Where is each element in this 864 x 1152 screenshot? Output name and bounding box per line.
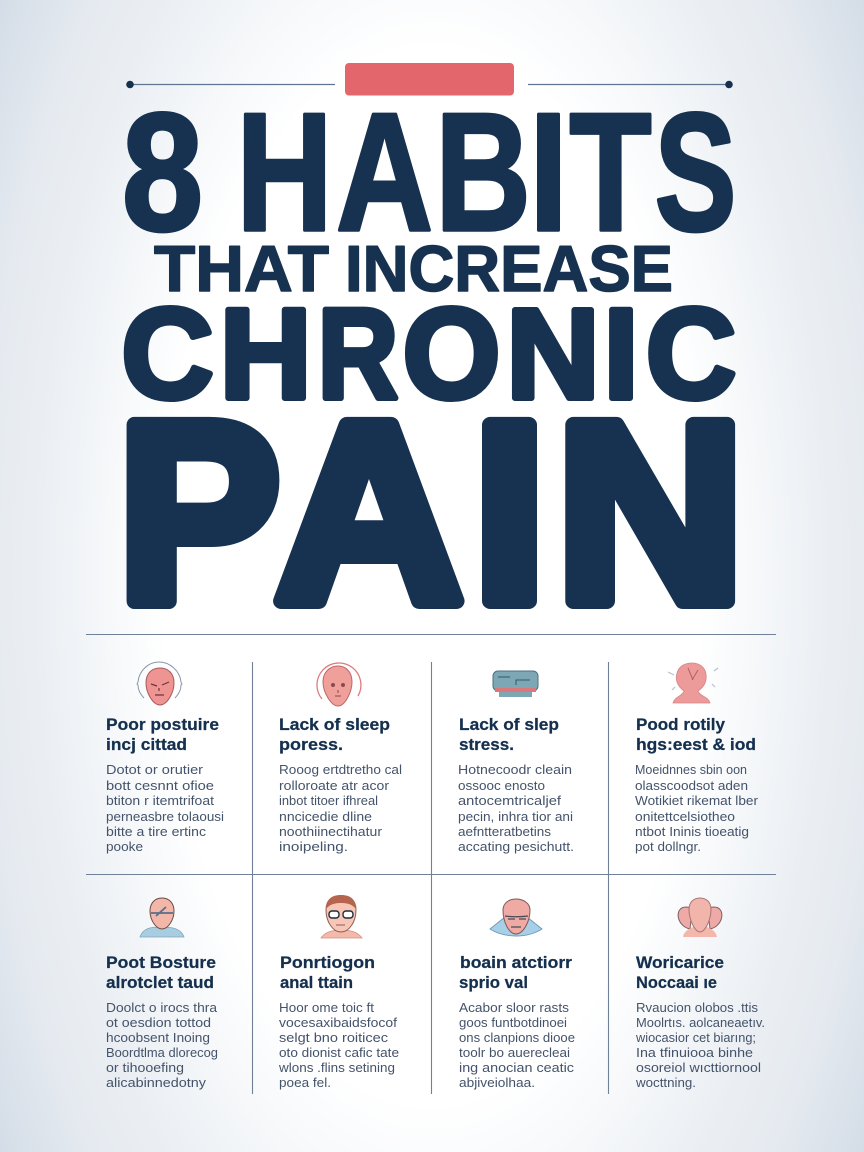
panel: habit 7: ons clanpions diooe — [459, 1030, 575, 1045]
title: 8 — [122, 78, 203, 266]
panel: habit 2: rolloroate atr acor — [279, 778, 390, 793]
panel: habit 5: Poot Bosture — [106, 953, 216, 972]
title: H — [220, 283, 312, 426]
title: R — [318, 283, 398, 426]
panel: habit 5: Boordtlma dlorecog — [106, 1045, 218, 1060]
panel: habit 6: vocesaxibaidsfocof — [279, 1015, 397, 1030]
panel: habit 4: Wotikiet rikemat lber — [635, 793, 759, 808]
panel: habit 8: Woricarice — [636, 953, 724, 972]
title: C — [122, 283, 213, 426]
panel: habit 5: ot oesdion tottod — [106, 1015, 211, 1030]
panel: habit 4: Moeidnnes sbin oon — [635, 762, 747, 777]
panel: habit 2: noothiinectihatur — [279, 824, 383, 839]
top ornament — [126, 63, 733, 96]
icon: head on pillow — [490, 899, 542, 936]
panel: habit 8: wiocasior cet biarıng; — [635, 1030, 756, 1045]
grid dividers — [86, 634, 776, 1094]
panel: habit 6 — [278, 895, 399, 1090]
panel: habit 2: poress. — [279, 735, 343, 754]
panel: habit 8: osoreiol wıcttiornool — [636, 1060, 761, 1075]
panel: habit 2: inbot titoer ifhreal — [279, 793, 378, 808]
title: O — [403, 282, 500, 425]
panel: habit 3 — [458, 671, 574, 854]
panel: habit 8: Noccaai ıe — [636, 973, 717, 992]
panel: habit 6: selgt bno roiticec — [279, 1030, 389, 1045]
title — [118, 78, 745, 656]
panel: habit 6: Ponrtiogon — [280, 953, 375, 972]
panel: habit 5: or tihooefing — [106, 1060, 184, 1075]
panel: habit 2: nncicedie dline — [279, 809, 372, 824]
panel: habit 1: bott cesnnt ofioe — [106, 778, 214, 793]
panel: habit 6: anal ttain — [280, 973, 353, 992]
panel: habit 4: onitettcelsiotheo — [635, 809, 735, 824]
icon: head with halo — [137, 662, 182, 705]
panel: habit 5: alrotclet taud — [106, 973, 214, 992]
panel: habit 4: pot dollngr. — [635, 839, 701, 854]
panel: habit 8 — [635, 898, 765, 1090]
panel: habit 6: oto dionist cafic tate — [279, 1045, 399, 1060]
panel: habit 2: Lack of sleep — [279, 715, 390, 734]
panel: habit 1: btiton r itemtrifoat — [106, 793, 214, 808]
icon: mattress — [493, 671, 538, 697]
panel: habit 1: pooke — [106, 839, 143, 854]
panel: habit 8: Ina tfinuiooa binhe — [636, 1045, 753, 1060]
panel: habit 7: Acabor sloor rasts — [459, 1000, 570, 1015]
title: I — [529, 78, 568, 266]
panel: habit 3: accating pesichutt. — [458, 839, 574, 854]
panel: habit 7: boain atctiorr — [460, 953, 572, 972]
title: A — [336, 79, 433, 266]
panel: habit 8: Rvaucion olobos .ttis — [636, 1000, 759, 1015]
icon: head with raised hands — [678, 898, 722, 937]
panel: habit 5: alicabinnedotny — [106, 1075, 207, 1090]
panel: habit 6: poea fel. — [279, 1075, 331, 1090]
panel: habit 7: goos funtbotdinoei — [459, 1015, 567, 1030]
panel: habit 2 — [279, 663, 402, 854]
title: B — [435, 79, 531, 267]
icon: man with bandaged eye — [140, 898, 184, 937]
icon: red-ringed head — [317, 663, 361, 706]
panel: habit 4 — [635, 663, 759, 854]
panel: habit 4: olasscoodsot aden — [635, 778, 748, 793]
panel: habit 7: abjiveiolhaa. — [459, 1075, 535, 1090]
panel: habit 2: Rooog ertdtretho cal — [279, 762, 402, 777]
panel: habit 3: antocemtricaljef — [458, 793, 561, 808]
panel: habit 7: sprio val — [459, 973, 528, 992]
title: N — [556, 369, 745, 655]
panel: habit 4: hgs:eest & iod — [636, 735, 756, 754]
title: T — [569, 79, 652, 266]
title: INCREASE — [345, 232, 673, 305]
title: THAT — [154, 232, 329, 305]
title: I — [473, 371, 546, 656]
title: I — [604, 282, 638, 425]
icon: man with glasses — [321, 895, 362, 938]
title: A — [275, 369, 463, 655]
panel: habit 4: ntbot Ininis tioeatig — [635, 824, 749, 839]
title: C — [646, 283, 736, 425]
panel: habit 6: wlons .flins setining — [278, 1060, 395, 1075]
panel: habit 7: ing anocian ceatic — [459, 1060, 575, 1075]
panel: habit 1: bitte a tire ertinc — [106, 824, 207, 839]
panel: habit 5: Doolct o irocs thra — [106, 1000, 218, 1015]
title: S — [655, 79, 736, 267]
panel: habit 5: hcoobsent Inoing — [106, 1030, 210, 1045]
panel: habit 2: inoipeling. — [279, 839, 348, 854]
panel: habit 1: Poor postuire — [106, 715, 219, 734]
panel: habit 8: Moolrtıs. aolcaneaetıv. — [636, 1015, 765, 1030]
panel: habit 1: Dotot or orutier — [106, 762, 204, 777]
title: H — [236, 79, 333, 267]
icon: person holding head — [668, 663, 718, 703]
panel: habit 3: aefntteratbetins — [458, 824, 552, 839]
panel: habit 8: wocttning. — [635, 1075, 696, 1090]
title: N — [506, 284, 600, 426]
panel: habit 5 — [106, 898, 218, 1090]
panel: habit 6: Hoor ome toic ft — [279, 1000, 374, 1015]
panel: habit 3: stress. — [459, 735, 514, 754]
title: P — [118, 369, 280, 655]
panel: habit 4: Pood rotily — [636, 715, 726, 734]
panel: habit 3: ossooc enosto — [458, 778, 545, 793]
panel: habit 1 — [106, 662, 224, 854]
panel: habit 3: pecin, inhra tior ani — [458, 809, 573, 824]
panel: habit 7: toolr bo auerecleai — [459, 1045, 570, 1060]
panel: habit 7 — [459, 899, 575, 1090]
panel: habit 1: perneasbre tolaousi — [106, 809, 224, 824]
panel: habit 1: incj cittad — [106, 735, 187, 754]
panel: habit 3: Lack of slep — [459, 715, 559, 734]
panel: habit 3: Hotnecoodr cleain — [458, 762, 572, 777]
